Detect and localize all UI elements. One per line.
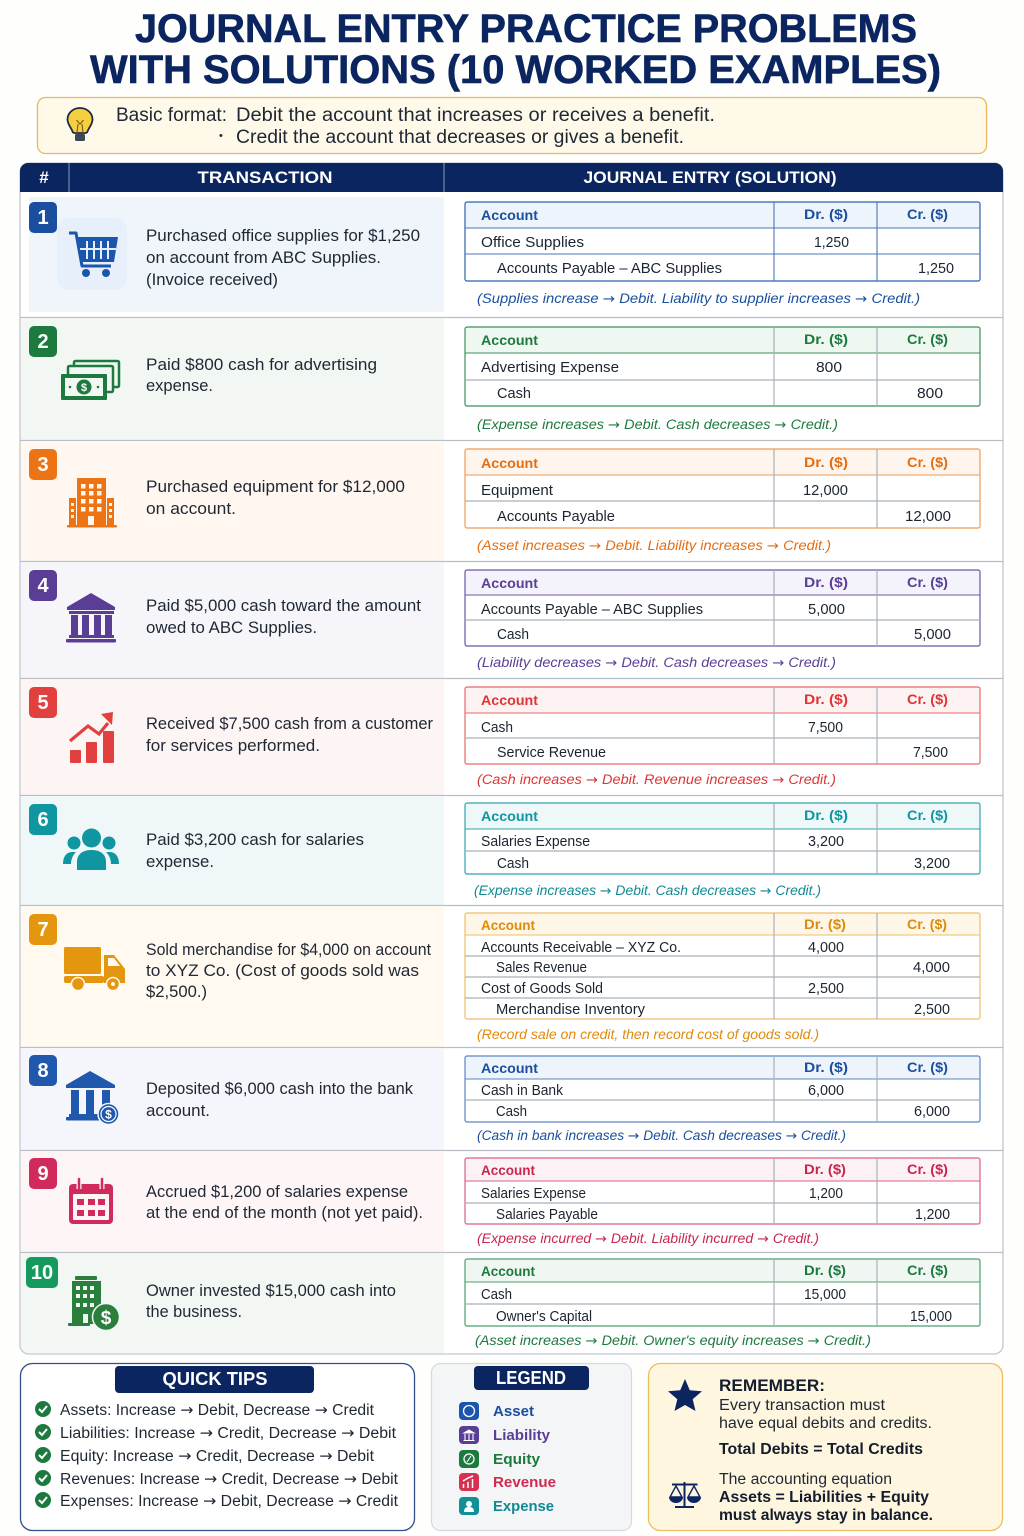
title: WITH SOLUTIONS (10 WORKED EXAMPLES) xyxy=(90,48,941,92)
table header: TRANSACTION xyxy=(198,168,332,187)
legend: liability: Liability xyxy=(493,1427,551,1444)
row 4 tint xyxy=(21,562,444,678)
journal table 1: Account xyxy=(481,207,538,223)
journal table 2: Account xyxy=(481,332,538,348)
row 1 xyxy=(29,197,980,312)
journal table 9: Dr. ($) xyxy=(804,1161,846,1177)
badge 7: 7 xyxy=(37,919,49,941)
remember text: Every transaction must xyxy=(719,1397,886,1414)
transaction 1: on account from ABC Supplies. xyxy=(146,249,381,267)
row 2 xyxy=(21,318,980,440)
transaction 6: Paid $3,200 cash for salaries xyxy=(146,831,364,849)
badge 7 xyxy=(29,914,57,945)
transaction 3: Purchased equipment for $12,000 xyxy=(146,478,405,496)
journal table 8: Cash xyxy=(496,1104,527,1120)
journal table 5: 7,500 xyxy=(913,745,948,761)
journal table 1 xyxy=(465,202,980,281)
journal table 10: Account xyxy=(481,1263,535,1279)
transaction 9: Accrued $1,200 of salaries expense xyxy=(146,1183,408,1201)
journal table 6: Salaries Expense xyxy=(481,834,590,850)
panel: remember xyxy=(648,1364,1002,1530)
journal table 10: 15,000 xyxy=(910,1309,952,1325)
transaction 7: $2,500.) xyxy=(146,983,207,1001)
row 7 xyxy=(21,906,980,1047)
note 7: (Record sale on credit, then record cost of goods sold.) xyxy=(477,1027,819,1042)
journal table 3: 12,000 xyxy=(905,509,951,525)
journal table 8: Dr. ($) xyxy=(804,1059,848,1075)
journal table 1: 1,250 xyxy=(918,261,954,277)
journal table 5: 7,500 xyxy=(808,720,843,736)
journal table 7: Accounts Receivable – XYZ Co. xyxy=(481,940,681,956)
badge 2 xyxy=(29,326,57,357)
icon: building with dollar: $ xyxy=(101,1308,112,1329)
transaction 1: Purchased office supplies for $1,250 xyxy=(146,227,420,245)
icon: cash: $ xyxy=(81,382,87,394)
badge 6: 6 xyxy=(37,809,49,831)
transaction 1 xyxy=(146,227,420,289)
legend: equity xyxy=(459,1450,541,1468)
legend: equity: Equity xyxy=(493,1451,541,1468)
transaction 7: to XYZ Co. (Cost of goods sold was xyxy=(146,962,419,980)
transaction 7: Sold merchandise for $4,000 on account xyxy=(146,941,431,959)
journal table 6: 3,200 xyxy=(808,834,844,850)
title: JOURNAL ENTRY PRACTICE PROBLEMS xyxy=(135,7,917,51)
journal table 8: 6,000 xyxy=(914,1104,950,1120)
journal table 4: Dr. ($) xyxy=(804,574,848,590)
legend: asset xyxy=(459,1402,534,1420)
badge 8 xyxy=(29,1055,57,1086)
badge 3 xyxy=(29,449,57,480)
journal table 5 xyxy=(465,687,980,764)
icon: bank xyxy=(66,593,116,642)
badge 4 xyxy=(29,570,57,601)
legend: revenue xyxy=(459,1473,556,1491)
journal table 4: Account xyxy=(481,575,538,591)
transaction 6 xyxy=(146,831,364,871)
panel: quick tips xyxy=(20,1364,414,1530)
note 2: (Expense increases → Debit. Cash decreases → Credit.) xyxy=(477,417,838,433)
journal table 7: Merchandise Inventory xyxy=(496,1002,646,1018)
transaction 3 xyxy=(146,478,405,518)
table header: JOURNAL ENTRY (SOLUTION) xyxy=(584,168,836,187)
badge 4: 4 xyxy=(37,575,49,597)
journal table 8: Cash in Bank xyxy=(481,1083,564,1099)
table header: # xyxy=(39,168,49,187)
equation text: The accounting equation xyxy=(719,1471,892,1488)
icon: building with dollar xyxy=(68,1276,120,1330)
icon: balance scale xyxy=(669,1482,701,1507)
table header xyxy=(20,163,1003,192)
remember text: Total Debits = Total Credits xyxy=(719,1441,923,1458)
journal table 4: Cr. ($) xyxy=(907,574,948,590)
badge 5 xyxy=(29,687,57,718)
journal table 7 xyxy=(465,913,980,1019)
transaction 5: for services performed. xyxy=(146,737,320,755)
badge 10 xyxy=(26,1257,58,1288)
legend heading: LEGEND xyxy=(496,1368,566,1388)
basic format text: Basic format: xyxy=(116,105,227,126)
badge 9: 9 xyxy=(37,1163,49,1185)
row 8 tint xyxy=(21,1048,444,1150)
journal table 7: 4,000 xyxy=(913,960,950,976)
row 5 xyxy=(21,679,980,795)
journal table 5: Account xyxy=(481,692,538,708)
remember text: REMEMBER: xyxy=(719,1376,825,1395)
transaction 7 xyxy=(146,941,431,1001)
basic format text: Credit the account that decreases or gives a benefit. xyxy=(236,127,684,148)
journal table 10: 15,000 xyxy=(804,1287,846,1303)
journal table 2: Advertising Expense xyxy=(481,360,619,376)
tip 3: Equity: Increase → Credit, Decrease → Debit xyxy=(60,1447,375,1465)
journal table 3: Cr. ($) xyxy=(907,454,948,470)
transaction 2: Paid $800 cash for advertising xyxy=(146,356,377,374)
tip 2: Liabilities: Increase → Credit, Decrease → Debit xyxy=(60,1424,397,1442)
basic format text: • xyxy=(219,130,223,142)
equation text xyxy=(719,1471,933,1524)
journal table 9: Account xyxy=(481,1162,535,1178)
journal table 9 xyxy=(465,1158,980,1224)
journal table 10 xyxy=(465,1259,980,1326)
icon: shopping cart xyxy=(57,218,127,290)
journal table 1: 1,250 xyxy=(814,235,849,251)
journal table 9: Salaries Expense xyxy=(481,1186,586,1202)
journal table 8: Account xyxy=(481,1060,538,1076)
journal table 1: Dr. ($) xyxy=(804,206,848,222)
transaction 10 xyxy=(146,1282,396,1321)
quick tips heading xyxy=(115,1366,314,1393)
transaction 5: Received $7,500 cash from a customer xyxy=(146,715,434,733)
tip 5: Expenses: Increase → Debit, Decrease → Credit xyxy=(60,1492,399,1510)
icon: growth chart xyxy=(70,712,114,763)
journal table 2: Dr. ($) xyxy=(804,331,848,347)
journal table 6: Account xyxy=(481,808,538,824)
row 2 tint xyxy=(21,318,444,440)
badge 2: 2 xyxy=(37,331,49,353)
journal table 7: Dr. ($) xyxy=(804,916,846,932)
row 6 xyxy=(21,796,980,905)
note 8: (Cash in bank increases → Debit. Cash decreases → Credit.) xyxy=(477,1128,846,1144)
journal table 3: Account xyxy=(481,455,538,471)
legend: revenue: Revenue xyxy=(493,1474,556,1491)
journal table 4 xyxy=(465,570,980,646)
journal table 7: Sales Revenue xyxy=(496,960,587,976)
legend: expense: Expense xyxy=(493,1498,554,1515)
journal table 9: 1,200 xyxy=(809,1186,843,1202)
journal table 6 xyxy=(465,803,980,874)
transaction 3: on account. xyxy=(146,500,236,518)
equation text: Assets = Liabilities + Equity xyxy=(719,1489,929,1506)
callout: basic format xyxy=(38,98,986,154)
tip 1: Assets: Increase → Debit, Decrease → Credit xyxy=(60,1401,375,1419)
note 5: (Cash increases → Debit. Revenue increases → Credit.) xyxy=(477,772,836,788)
journal table 10: Dr. ($) xyxy=(804,1262,846,1278)
legend heading xyxy=(474,1366,589,1390)
icon: calendar xyxy=(69,1179,113,1224)
badge 10: 10 xyxy=(31,1262,53,1284)
quick tips heading: QUICK TIPS xyxy=(162,1369,268,1389)
journal table 1: Cr. ($) xyxy=(907,206,948,222)
tip 4: Revenues: Increase → Credit, Decrease → Debit xyxy=(60,1470,399,1488)
journal table 4: Accounts Payable – ABC Supplies xyxy=(481,602,703,618)
row 10 xyxy=(21,1253,980,1353)
badge 6 xyxy=(29,804,57,835)
transaction 4: Paid $5,000 cash toward the amount xyxy=(146,597,421,615)
transaction 8 xyxy=(146,1080,414,1120)
journal table 3: 12,000 xyxy=(803,483,848,499)
panel: legend xyxy=(432,1364,632,1530)
note 6: (Expense increases → Debit. Cash decreases → Credit.) xyxy=(474,883,821,899)
remember text xyxy=(719,1376,932,1458)
badge 1 xyxy=(29,202,57,233)
legend: liability xyxy=(459,1426,551,1444)
icon: light bulb xyxy=(68,108,92,141)
journal table 10: Owner's Capital xyxy=(496,1309,592,1325)
row 10 tint xyxy=(21,1253,444,1353)
journal table 7: Cost of Goods Sold xyxy=(481,981,603,997)
note 3: (Asset increases → Debit. Liability increases → Credit.) xyxy=(477,538,831,554)
transaction 5 xyxy=(146,715,434,755)
journal table 10: Cr. ($) xyxy=(907,1262,948,1278)
note 9: (Expense incurred → Debit. Liability incurred → Credit.) xyxy=(477,1231,819,1247)
journal table 7: 2,500 xyxy=(914,1002,950,1018)
journal table 6: Dr. ($) xyxy=(804,807,848,823)
journal table 6: Cash xyxy=(497,856,529,872)
journal table 1: Accounts Payable – ABC Supplies xyxy=(497,261,722,277)
icon: bank with dollar xyxy=(66,1071,119,1124)
journal table 7: Account xyxy=(481,917,535,933)
transaction 8: Deposited $6,000 cash into the bank xyxy=(146,1080,414,1098)
badge 5: 5 xyxy=(37,692,49,714)
transaction 9 xyxy=(146,1183,423,1222)
journal table 2: 800 xyxy=(816,360,842,376)
journal table 3: Dr. ($) xyxy=(804,454,848,470)
basic format text: Debit the account that increases or receives a benefit. xyxy=(236,105,715,126)
journal table 8: Cr. ($) xyxy=(907,1059,948,1075)
transaction 10: the business. xyxy=(146,1303,242,1321)
journal table 10: Cash xyxy=(481,1287,512,1303)
row 1 tint xyxy=(29,197,444,312)
transaction 4 xyxy=(146,597,421,637)
transaction 2: expense. xyxy=(146,377,213,395)
journal table 3: Equipment xyxy=(481,483,553,499)
row 6 tint xyxy=(21,796,444,905)
legend: asset: Asset xyxy=(493,1403,534,1420)
note 1: (Supplies increase → Debit. Liability to supplier increases → Credit.) xyxy=(477,291,920,307)
badge 1: 1 xyxy=(37,207,49,229)
journal table 5: Service Revenue xyxy=(497,745,606,761)
journal table 3: Accounts Payable xyxy=(497,509,615,525)
journal table 4: 5,000 xyxy=(914,627,951,643)
journal table 7: 4,000 xyxy=(808,940,844,956)
journal table 2: Cr. ($) xyxy=(907,331,948,347)
transaction 4: owed to ABC Supplies. xyxy=(146,619,317,637)
badge 8: 8 xyxy=(37,1060,49,1082)
journal table 5: Dr. ($) xyxy=(804,691,848,707)
row 9 xyxy=(21,1151,980,1252)
icon: bank with dollar: $ xyxy=(105,1108,112,1122)
main table frame xyxy=(20,163,1003,1354)
journal table 7: 2,500 xyxy=(808,981,844,997)
note 4: (Liability decreases → Debit. Cash decreases → Credit.) xyxy=(477,655,836,671)
transaction 6: expense. xyxy=(146,853,214,871)
journal table 8 xyxy=(465,1056,980,1122)
icon: star xyxy=(668,1379,702,1411)
badge 3: 3 xyxy=(37,454,49,476)
transaction 8: account. xyxy=(146,1102,210,1120)
journal table 2: Cash xyxy=(497,386,531,402)
icon: cash xyxy=(61,361,119,400)
journal table 6: Cr. ($) xyxy=(907,807,948,823)
journal table 5: Cash xyxy=(481,720,513,736)
icon: delivery truck xyxy=(64,947,125,990)
journal table 9: Cr. ($) xyxy=(907,1161,948,1177)
journal table 8: 6,000 xyxy=(808,1083,844,1099)
note 10: (Asset increases → Debit. Owner's equity increases → Credit.) xyxy=(475,1333,871,1349)
row 4 xyxy=(21,562,980,678)
transaction 10: Owner invested $15,000 cash into xyxy=(146,1282,396,1300)
remember text: have equal debits and credits. xyxy=(719,1415,932,1432)
journal table 6: 3,200 xyxy=(914,856,950,872)
journal table 9: 1,200 xyxy=(915,1207,950,1223)
badge 9 xyxy=(29,1158,57,1189)
journal table 3 xyxy=(465,449,980,528)
row 5 tint xyxy=(21,679,444,795)
icon: office building xyxy=(67,478,117,528)
journal table 2: 800 xyxy=(917,386,943,402)
row 9 tint xyxy=(21,1151,444,1252)
row 3 xyxy=(21,441,980,561)
transaction 2 xyxy=(146,356,377,395)
legend: expense xyxy=(459,1497,554,1515)
row 8 xyxy=(21,1048,980,1150)
journal table 4: Cash xyxy=(497,627,529,643)
transaction 9: at the end of the month (not yet paid). xyxy=(146,1204,423,1222)
journal table 2 xyxy=(465,327,980,406)
icon: people xyxy=(63,828,119,870)
journal table 5: Cr. ($) xyxy=(907,691,948,707)
journal table 9: Salaries Payable xyxy=(496,1207,598,1223)
row 7 tint xyxy=(21,906,444,1047)
title xyxy=(90,7,941,92)
journal table 7: Cr. ($) xyxy=(907,916,947,932)
transaction 1: (Invoice received) xyxy=(146,271,278,289)
row 3 tint xyxy=(21,441,444,561)
equation text: must always stay in balance. xyxy=(719,1507,933,1524)
journal table 4: 5,000 xyxy=(808,602,845,618)
basic format text xyxy=(116,105,715,148)
journal table 1: Office Supplies xyxy=(481,235,584,251)
